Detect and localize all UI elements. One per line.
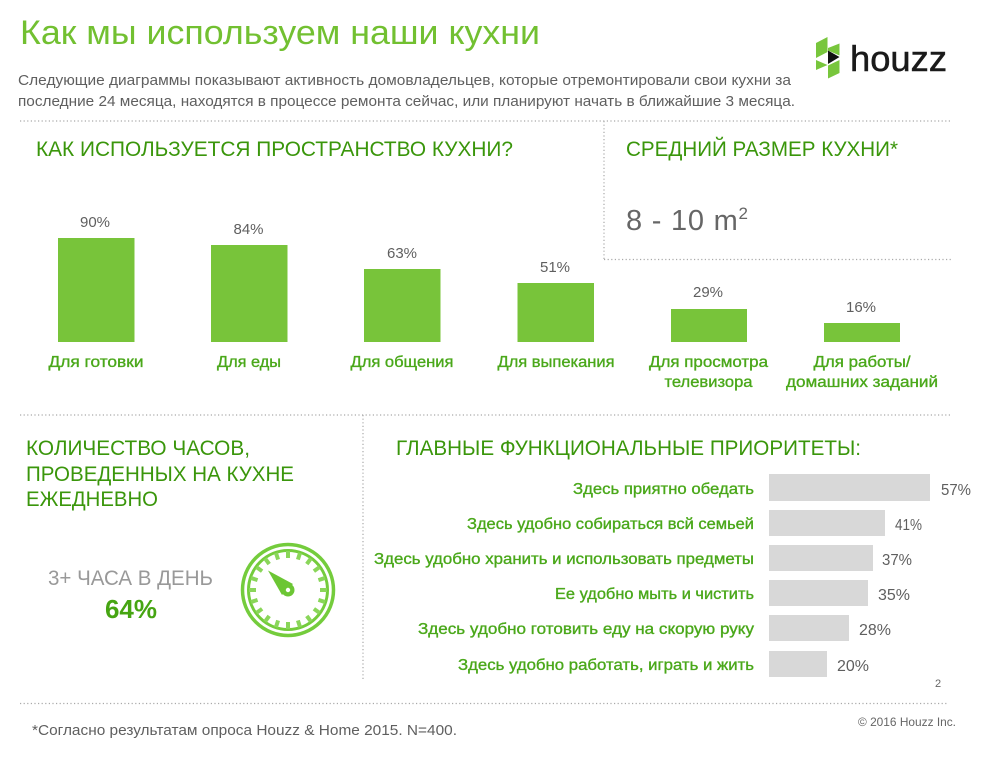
panel: average kitchen size [626, 137, 898, 237]
heading: КОЛИЧЕСТВО ЧАСОВ, [26, 437, 250, 460]
bar chart: 84% [233, 221, 264, 238]
percentage: 64% [105, 594, 157, 624]
panel: kitchen space usage [36, 138, 938, 391]
houzz wordmark: houzz [850, 38, 947, 79]
bar chart: домашних заданий [786, 374, 938, 391]
icon: gauge [242, 544, 334, 636]
bar chart: Для готовки [48, 354, 144, 371]
horizontal bar chart: 35% [878, 587, 910, 604]
hours label: 3+ ЧАСА В ДЕНЬ [48, 567, 213, 590]
bar chart: 63% [387, 245, 417, 262]
icon: houzz logo [816, 37, 947, 79]
heading: СРЕДНИЙ РАЗМЕР КУХНИ* [626, 137, 898, 161]
panel: functional priorities [374, 437, 971, 677]
heading: ПРОВЕДЕННЫХ НА КУХНЕ [26, 463, 294, 486]
bar chart: Для еды [217, 354, 281, 371]
bar chart: 16% [846, 299, 876, 316]
page number: 2 [935, 678, 941, 690]
size value: 8 - 10 m [626, 205, 738, 237]
horizontal bar chart: Здесь удобно собираться всй семьей [467, 516, 754, 533]
heading: ГЛАВНЫЕ ФУНКЦИОНАЛЬНЫЕ ПРИОРИТЕТЫ: [396, 437, 861, 460]
intro text: последние 24 месяца, находятся в процессе ремонта сейчас, или планируют начать в ближайшие 3 месяца. [18, 93, 795, 110]
title: Как мы используем наши кухни [20, 14, 540, 52]
horizontal bar chart: Здесь удобно готовить еду на скорую руку [418, 621, 754, 638]
horizontal bar chart: Ее удобно мыть и чистить [555, 586, 754, 603]
bar chart: 90% [80, 214, 110, 231]
bar chart: 29% [693, 284, 723, 301]
horizontal bar chart: Здесь удобно хранить и использовать предметы [374, 551, 754, 568]
bar chart: 51% [540, 259, 570, 276]
horizontal bar chart: 28% [859, 622, 891, 639]
bar chart: Для выпекания [498, 354, 614, 371]
footnote: *Согласно результатам опроса Houzz & Home 2015. N=400. [32, 722, 457, 739]
intro text: Следующие диаграммы показывают активность домовладельцев, которые отремонтировали свои кухни за [18, 72, 792, 89]
bar chart: телевизора [664, 374, 753, 391]
horizontal bar chart: Здесь удобно работать, играть и жить [458, 657, 754, 674]
horizontal bar chart: 41% [895, 517, 922, 534]
size value: 2 [739, 204, 748, 223]
heading: КАК ИСПОЛЬЗУЕТСЯ ПРОСТРАНСТВО КУХНИ? [36, 138, 513, 161]
bar chart: Для общения [350, 354, 454, 371]
bar chart: Для просмотра [649, 354, 768, 371]
horizontal bar chart: 20% [837, 658, 869, 675]
bar chart [48, 214, 938, 391]
horizontal bar chart: 37% [882, 552, 912, 569]
horizontal bar chart: Здесь приятно обедать [573, 481, 754, 498]
heading: ЕЖЕДНЕВНО [26, 488, 158, 511]
panel: hours per day [26, 437, 334, 636]
horizontal bar chart: 57% [941, 482, 971, 499]
intro text [18, 72, 795, 110]
horizontal bar chart [374, 474, 971, 677]
copyright: © 2016 Houzz Inc. [858, 715, 956, 729]
heading [26, 437, 294, 511]
bar chart: Для работы/ [814, 354, 911, 371]
